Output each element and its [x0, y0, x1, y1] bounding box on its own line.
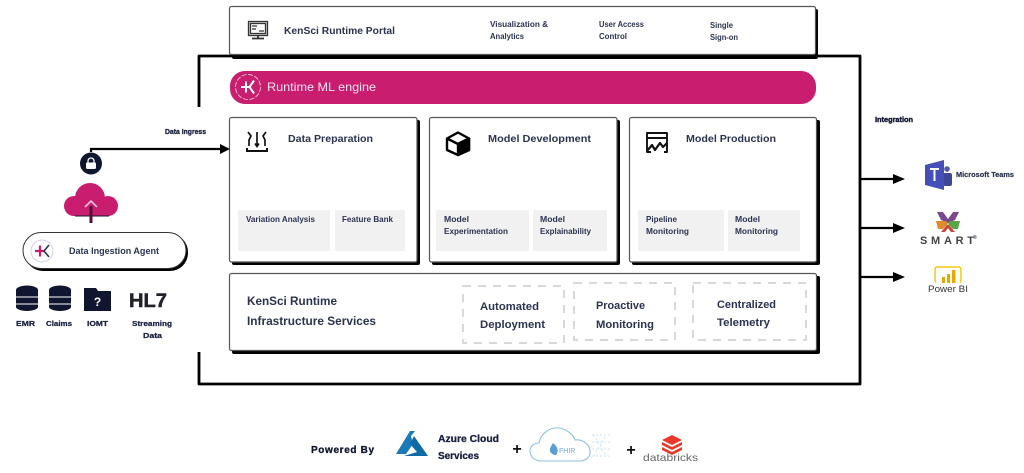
- text: single sign-on: [710, 21, 738, 42]
- logo: Power BI: Power BI: [928, 284, 968, 294]
- logo: databricks: [643, 435, 698, 464]
- icon: KenSci logo: [236, 74, 260, 100]
- panel: KenSci Runtime Portal: [230, 6, 818, 59]
- sub-box: Variation Analysis: Variation Analysis: [246, 215, 315, 224]
- box: Centralized Telemetry: Telemetry: [717, 317, 771, 329]
- box: Automated Deployment: [463, 286, 564, 343]
- text: Azure Cloud Services: Azure Cloud: [438, 434, 499, 445]
- text: single sign-on: Sign-on: [710, 33, 738, 42]
- sub-box: Variation Analysis: [238, 210, 330, 251]
- panel: Data Ingestion Agent: [23, 232, 188, 271]
- box: Automated Deployment: Deployment: [480, 319, 545, 331]
- logo: SMART: SMART: [920, 235, 974, 247]
- sub-box: Pipeline Monitoring: [638, 210, 724, 251]
- heading: [247, 296, 376, 328]
- icon: Claims database: [49, 286, 71, 311]
- label: Integration: Integration: [875, 115, 913, 124]
- sub-box: Pipeline Monitoring: Monitoring: [646, 227, 689, 236]
- text: Azure Cloud Services: Services: [438, 451, 479, 462]
- text: Azure Cloud Services: [438, 434, 499, 462]
- text: visualization and analytics: [490, 20, 548, 41]
- icon: lock: [80, 152, 102, 174]
- arrow: data ingress: [91, 144, 230, 154]
- text: plus: +: [512, 441, 522, 458]
- sub-box: Model Monitoring: Model: [735, 215, 760, 224]
- labels: data sources: EMR: [16, 319, 36, 328]
- text: user access control: User Access: [599, 20, 644, 29]
- icon: monitor: [248, 22, 268, 38]
- logo: HL7: HL7: [129, 291, 167, 312]
- icon: IOMT folder: ?: [94, 295, 101, 309]
- text: visualization and analytics: Visualization &: [490, 20, 548, 29]
- labels: data sources: Claims: [46, 319, 72, 328]
- text: single sign-on: Single: [710, 21, 733, 30]
- heading: Data Preparation: [288, 133, 373, 145]
- sub-box: Model Explainability: Model: [540, 215, 565, 224]
- logo: Azure: [396, 431, 428, 456]
- box: Centralized Telemetry: [693, 283, 806, 340]
- box: Proactive Monitoring: Monitoring: [596, 319, 654, 331]
- icon: KenSci logo small: [31, 240, 53, 262]
- logo: FHIR cloud: [530, 428, 612, 461]
- logo: databricks: databricks: [643, 452, 698, 464]
- labels: data sources: IOMT: [87, 319, 108, 328]
- logo: SMART: [920, 212, 977, 247]
- sub-box: Model Explainability: Explainability: [540, 227, 591, 236]
- labels: data sources: Streaming: [132, 319, 172, 328]
- icon: IOMT folder: [84, 288, 111, 311]
- labels: data sources: Data: [143, 331, 163, 340]
- arrow: to Teams: [861, 174, 905, 184]
- sub-box: Feature Bank: Feature Bank: [342, 215, 393, 224]
- sub-box: Pipeline Monitoring: Pipeline: [646, 215, 677, 224]
- heading: portal: KenSci Runtime Portal: [284, 25, 395, 37]
- sub-box: Model Experimentation: Model: [444, 215, 469, 224]
- logo: SMART: ®: [973, 234, 977, 241]
- box: Centralized Telemetry: Centralized: [717, 299, 776, 311]
- heading: Model Development: [488, 133, 592, 145]
- panel: Infrastructure Services: [230, 274, 820, 354]
- text: user access control: Control: [599, 32, 627, 41]
- sub-box: Model Experimentation: Experimentation: [444, 227, 508, 236]
- icon: upload cloud: [64, 183, 118, 223]
- icon: data preparation: [247, 132, 267, 151]
- sub-box: Model Monitoring: [728, 210, 800, 251]
- sub-box: Model Explainability: [533, 210, 607, 251]
- arrow: to SMART: [861, 223, 905, 233]
- label: Data Ingestion Agent: [69, 246, 160, 257]
- arrow: to Power BI: [861, 272, 905, 282]
- icon: chart window: [647, 133, 667, 152]
- logo: FHIR cloud: FHIR: [559, 448, 575, 455]
- box: Proactive Monitoring: Proactive: [596, 300, 645, 312]
- label: Data Ingress: Data Ingress: [165, 127, 206, 136]
- sub-box: Feature Bank: [335, 210, 405, 251]
- box: Automated Deployment: Automated: [480, 301, 539, 313]
- logo: Power BI: [928, 267, 968, 294]
- labels: data sources: [16, 319, 172, 340]
- sub-box: Model Monitoring: Monitoring: [735, 227, 778, 236]
- panel: Data Preparation: [230, 118, 420, 265]
- sub-box: Model Experimentation: [436, 210, 529, 251]
- heading: Model Production: [686, 133, 776, 145]
- logo: Microsoft Teams: Microsoft Teams: [956, 170, 1014, 179]
- text: user access control: [599, 20, 644, 41]
- text: plus: +: [626, 442, 636, 459]
- panel: Model Production: [630, 118, 820, 265]
- panel: outer runtime frame: [199, 56, 860, 384]
- heading: KenSci Runtime: [247, 296, 337, 308]
- box: Proactive Monitoring: [574, 283, 675, 340]
- text: visualization and analytics: Analytics: [490, 32, 524, 41]
- text: Powered By: Powered By: [311, 445, 374, 456]
- icon: EMR database: [16, 286, 38, 311]
- icon: cube: [447, 132, 469, 155]
- logo: Microsoft Teams: [925, 160, 1014, 190]
- heading: Infrastructure Services: [247, 316, 376, 328]
- heading: ML engine: Runtime ML engine: [267, 80, 376, 94]
- panel: Runtime ML engine bar: [230, 71, 816, 104]
- panel: Model Development: [430, 118, 620, 265]
